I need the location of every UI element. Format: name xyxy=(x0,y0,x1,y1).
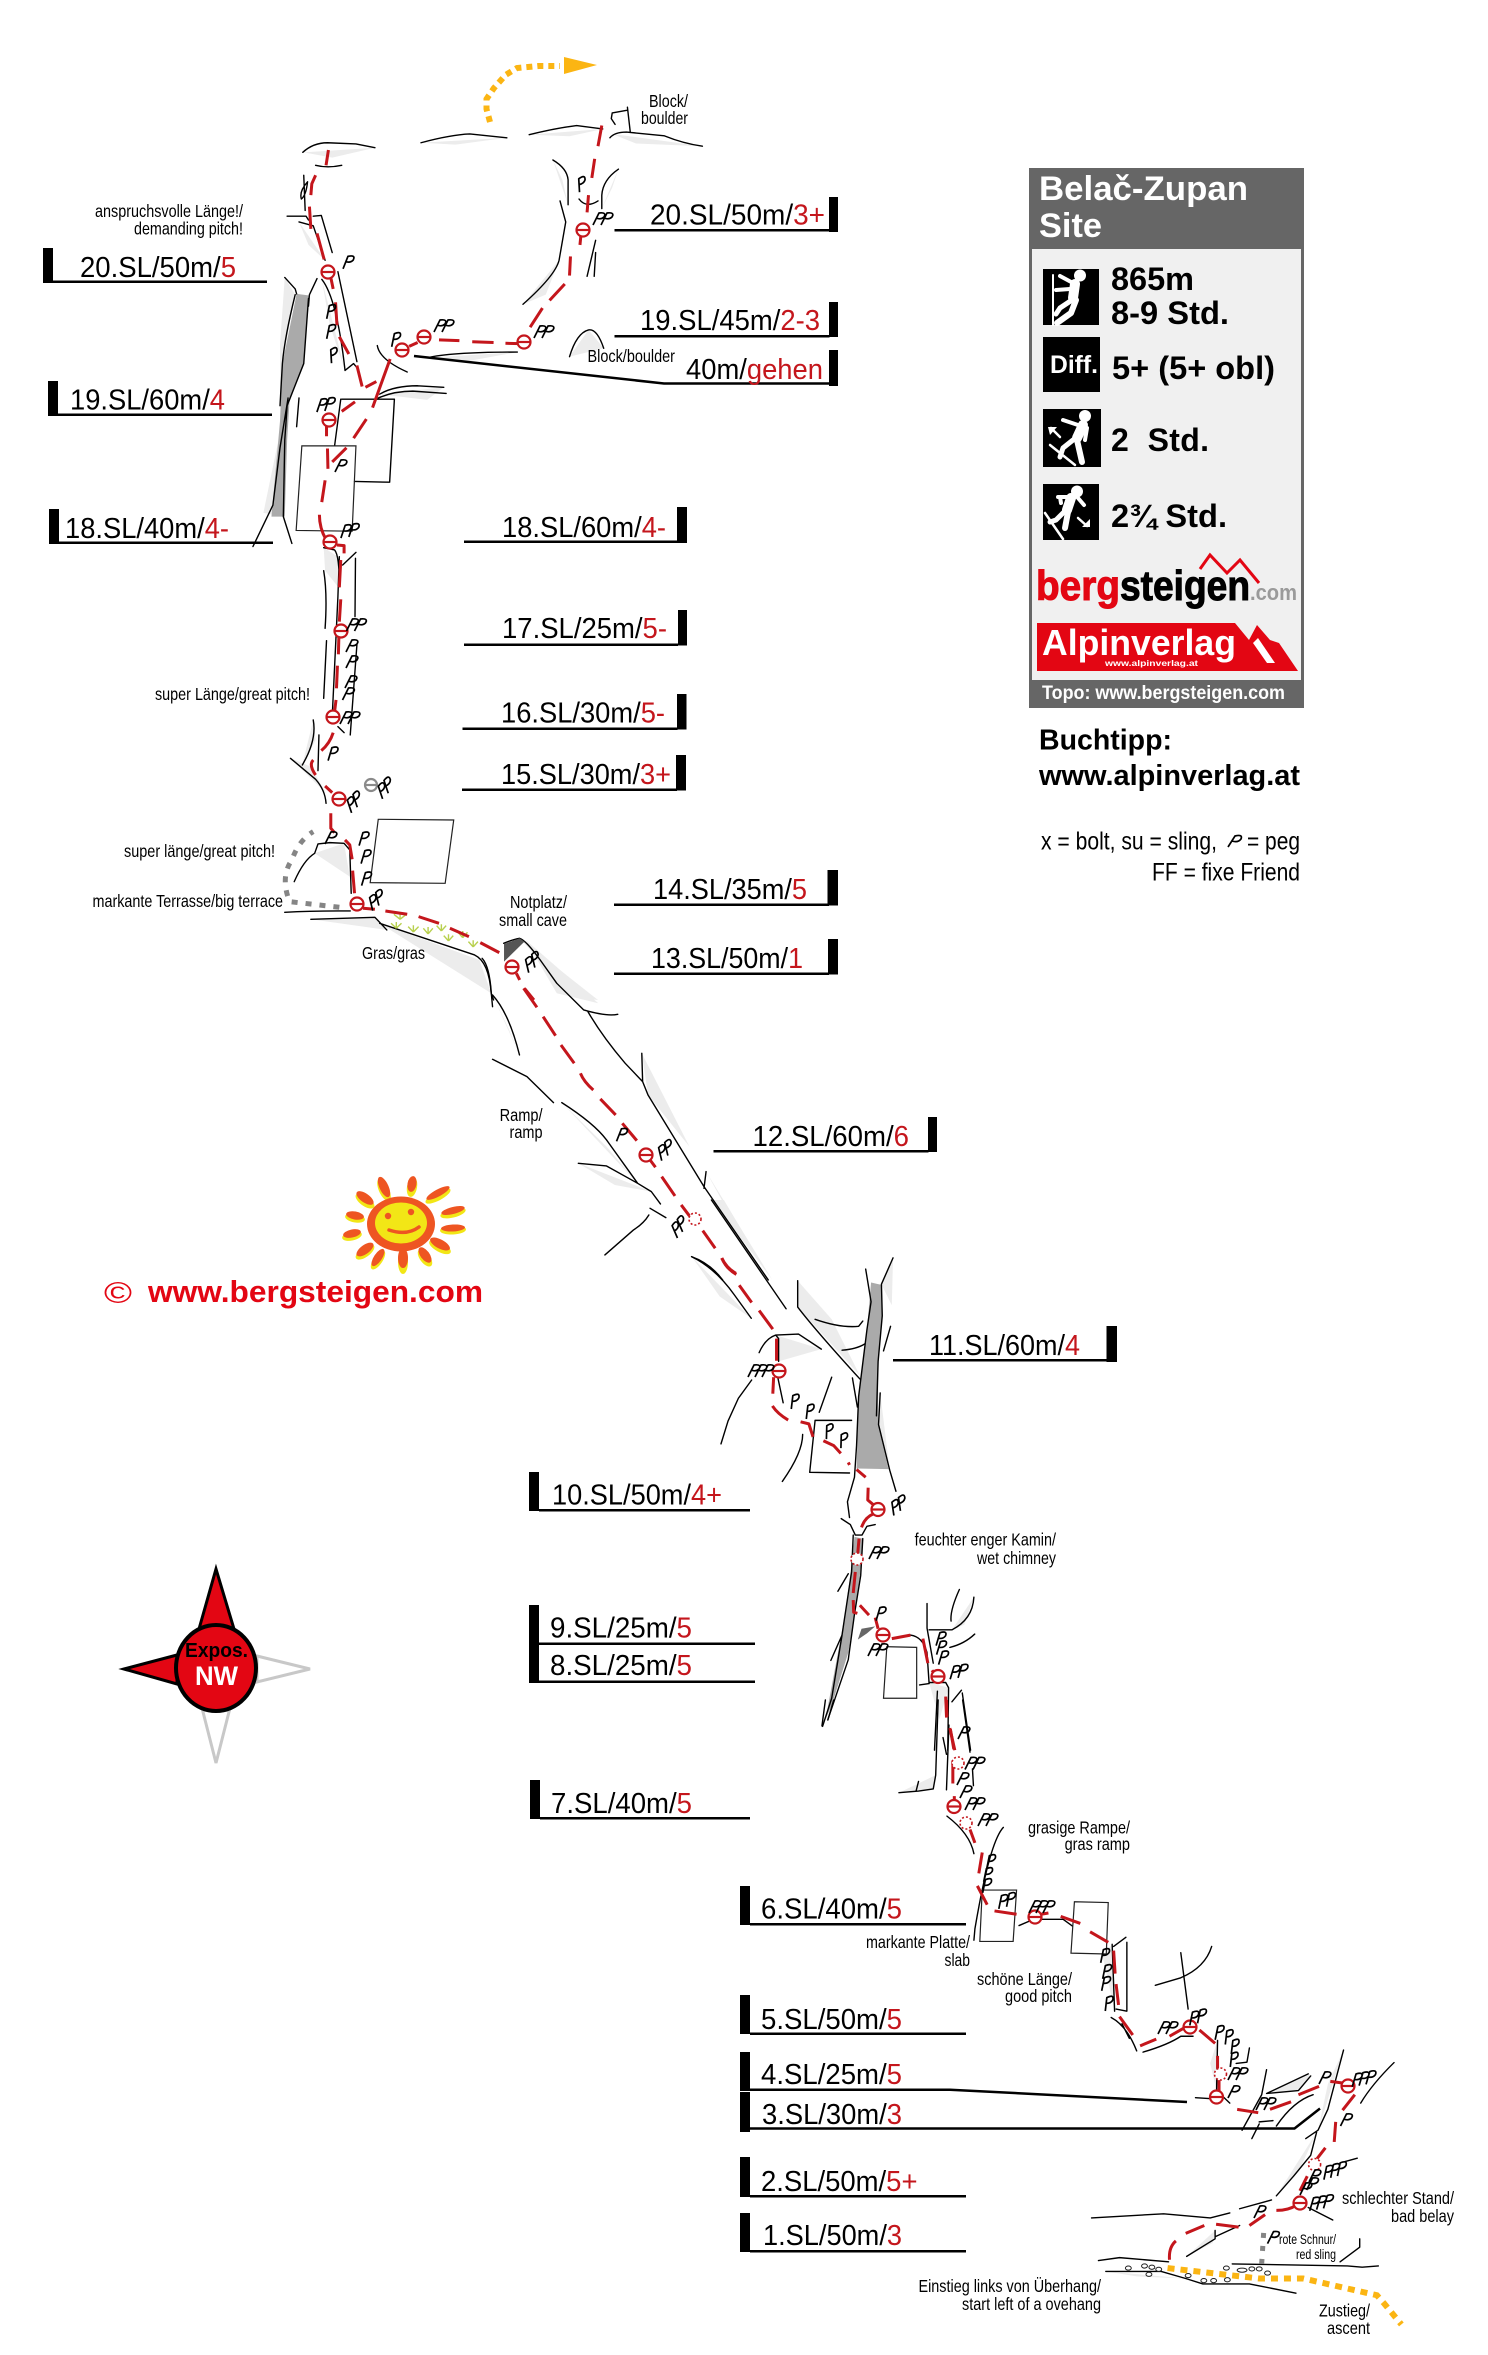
note: great pitch lower: super länge/great pitch! xyxy=(124,841,275,861)
label: pitch 7: 7.SL/40m/5 xyxy=(551,1788,692,1820)
note: great pitch upper: super Länge/great pitch! xyxy=(155,684,310,704)
note: good pitch xyxy=(977,1969,1072,2006)
note: wet chimney xyxy=(915,1530,1056,1568)
label: pitch 1 xyxy=(740,2213,966,2252)
logo: Alpinverlag xyxy=(1037,622,1298,671)
label: pitch 7 xyxy=(530,1780,750,1820)
pitch labels left xyxy=(43,248,1320,2252)
legend: FF = fixe Friend xyxy=(1152,859,1300,887)
label: pitch 14: 14.SL/35m/5 xyxy=(653,874,807,906)
label: pitch 11 xyxy=(893,1326,1117,1362)
note: small cave: small cave xyxy=(499,910,567,930)
peg symbols xyxy=(315,176,1378,2244)
stat: height and time: 865m xyxy=(1111,261,1194,297)
note: grass ramp: grasige Rampe/ xyxy=(1028,1818,1130,1838)
dark grey rock bands xyxy=(271,294,888,1719)
note: grass ramp xyxy=(1028,1818,1130,1854)
label: pitches 9 and 8: 8.SL/25m/5 xyxy=(550,1650,692,1682)
note: red sling xyxy=(1279,2231,1336,2262)
label: pitches 9 and 8 xyxy=(529,1605,755,1683)
label: pitch 1: 1.SL/50m/3 xyxy=(763,2220,902,2252)
label: pitch 20 left: 20.SL/50m/5 xyxy=(80,252,236,284)
stat: height and time xyxy=(1111,261,1229,331)
label: pitch 11: 11.SL/60m/4 xyxy=(929,1330,1080,1362)
legend: = peg xyxy=(1247,828,1300,856)
label: pitch 5 xyxy=(740,1995,966,2036)
pebbles at the start xyxy=(1125,2264,1270,2283)
note: slab: slab xyxy=(944,1950,970,1970)
note: block boulder top: Block/ xyxy=(649,91,688,111)
label: pitch 15: 15.SL/30m/3+ xyxy=(501,759,671,791)
note: start xyxy=(918,2276,1101,2314)
note: start: start left of a ovehang xyxy=(962,2294,1101,2314)
note: ascent: Zustieg/ xyxy=(1319,2300,1370,2320)
note: wet chimney: feuchter enger Kamin/ xyxy=(915,1530,1056,1550)
stat: height and time: 8-9 Std. xyxy=(1111,295,1229,331)
label: walking section 40m: 40m/gehen xyxy=(686,354,823,386)
note: grass ramp: gras ramp xyxy=(1065,1834,1130,1854)
label: pitch 12: 12.SL/60m/6 xyxy=(752,1121,909,1153)
note: grass: Gras/gras xyxy=(362,943,425,963)
approach path dotted xyxy=(1168,2268,1401,2324)
note: start: Einstieg links von Überhang/ xyxy=(918,2276,1101,2296)
label: pitch 19 left: 19.SL/60m/4 xyxy=(70,384,225,416)
logo: bergsteigen xyxy=(1036,555,1297,609)
book tip xyxy=(1038,724,1300,792)
note: red sling: rote Schnur/ xyxy=(1279,2231,1336,2247)
label: pitch 6 xyxy=(740,1886,966,1926)
label: pitch 14 xyxy=(614,870,838,906)
note: demanding pitch: anspruchsvolle Länge!/ xyxy=(95,201,243,221)
logo: bergsteigen: .com xyxy=(1250,580,1297,605)
stat: descent time: 2¾ Std. xyxy=(1111,498,1227,534)
note: slab xyxy=(866,1932,970,1970)
icon: climber xyxy=(1043,269,1099,325)
label: pitch 10: 10.SL/50m/4+ xyxy=(552,1480,722,1512)
compass exposure NW: Expos. xyxy=(185,1640,248,1662)
note: demanding pitch xyxy=(95,201,243,239)
belay stations xyxy=(322,224,1354,2210)
small cave and boulder shadows xyxy=(504,938,875,1640)
red route line xyxy=(309,126,1355,2260)
label: pitch 17 xyxy=(464,610,687,646)
note: ramp: ramp xyxy=(510,1122,542,1142)
note: ramp: Ramp/ xyxy=(500,1105,543,1125)
note: good pitch: schöne Länge/ xyxy=(977,1969,1072,1989)
logo: Alpinverlag: www.alpinverlag.at xyxy=(1104,658,1198,668)
compass exposure NW: NW xyxy=(195,1661,238,1691)
icon: descent xyxy=(1043,484,1099,540)
icon: difficulty: Diff. xyxy=(1050,351,1098,379)
panel: route info xyxy=(1029,168,1304,708)
label: pitch 15 xyxy=(462,755,686,791)
note: bad belay: schlechter Stand/ xyxy=(1342,2188,1454,2208)
label: pitch 3 xyxy=(740,2092,1320,2132)
label: pitch 4: 4.SL/25m/5 xyxy=(761,2059,902,2091)
title: Belač-Zupan xyxy=(1039,170,1248,208)
grey dotted variants xyxy=(285,832,1264,2264)
label: pitch 18 left xyxy=(49,509,273,545)
label: pitches 9 and 8: 9.SL/25m/5 xyxy=(550,1612,692,1644)
note: small cave: Notplatz/ xyxy=(510,892,567,912)
label: pitch 18 left: 18.SL/40m/4- xyxy=(65,513,229,545)
note: block boulder top xyxy=(641,91,688,128)
note: ramp xyxy=(500,1105,543,1142)
book tip: Buchtipp: xyxy=(1039,724,1172,756)
label: pitch 20 left xyxy=(43,248,267,284)
logo: bergsteigen: berg xyxy=(1036,562,1120,609)
label: pitch 19 right: 19.SL/45m/2-3 xyxy=(640,305,820,337)
note: block boulder: Block/boulder xyxy=(588,346,675,366)
label: pitch 16 xyxy=(462,694,686,730)
label: pitch 13 xyxy=(614,939,838,975)
descent arrow xyxy=(486,57,597,122)
label: pitch 12 xyxy=(714,1117,937,1153)
book tip: www.alpinverlag.at xyxy=(1038,760,1300,792)
label: pitch 18 right xyxy=(464,507,687,544)
icon: difficulty xyxy=(1043,337,1100,392)
note: big terrace: markante Terrasse/big terrace xyxy=(92,891,283,911)
icon: approach xyxy=(1043,409,1101,467)
title: Site xyxy=(1039,207,1102,245)
icon: sun logo xyxy=(341,1175,467,1274)
legend: x = bolt, su = sling, xyxy=(1041,828,1217,856)
logo: bergsteigen: steigen xyxy=(1120,562,1250,609)
rock outlines xyxy=(253,107,1394,2293)
label: pitch 19 left xyxy=(48,381,272,416)
pitch labels right xyxy=(414,197,1117,1362)
label: pitch 18 right: 18.SL/60m/4- xyxy=(502,512,666,544)
label: walking section 40m xyxy=(414,350,838,386)
title xyxy=(1039,170,1248,245)
stat: difficulty: 5+ (5+ obl) xyxy=(1112,350,1275,386)
label: pitch 13: 13.SL/50m/1 xyxy=(651,943,803,975)
stat: approach time: 2 Std. xyxy=(1111,422,1209,458)
note: ascent: ascent xyxy=(1327,2318,1370,2338)
logo: Alpinverlag: Alpinverlag xyxy=(1042,622,1236,663)
compass exposure NW xyxy=(124,1569,310,1763)
label: pitch 4 xyxy=(740,2052,1187,2102)
note: wet chimney: wet chimney xyxy=(976,1548,1056,1568)
note: good pitch: good pitch xyxy=(1005,1986,1072,2006)
rock shading xyxy=(263,129,1344,2279)
legend xyxy=(1041,828,1300,887)
label: pitch 2 xyxy=(740,2157,966,2198)
note: small cave xyxy=(499,892,567,930)
note: demanding pitch: demanding pitch! xyxy=(134,219,243,239)
footer credit: Topo: www.bergsteigen.com xyxy=(1042,683,1285,704)
label: pitch 5: 5.SL/50m/5 xyxy=(761,2004,902,2036)
label: pitch 20 right: 20.SL/50m/3+ xyxy=(650,200,825,232)
label: pitch 16: 16.SL/30m/5- xyxy=(501,698,665,730)
note: ascent xyxy=(1319,2300,1370,2338)
note: block boulder top: boulder xyxy=(641,108,688,128)
label: pitch 6: 6.SL/40m/5 xyxy=(761,1894,902,1926)
label: pitch 3: 3.SL/30m/3 xyxy=(762,2099,902,2131)
note: bad belay xyxy=(1342,2188,1454,2226)
note: bad belay: bad belay xyxy=(1391,2206,1454,2226)
label: pitch 2: 2.SL/50m/5+ xyxy=(761,2166,918,2198)
grass patches xyxy=(391,913,478,947)
copyright link: © xyxy=(104,1277,132,1310)
note: red sling: red sling xyxy=(1296,2246,1336,2262)
label: pitch 10 xyxy=(529,1472,750,1512)
copyright link: www.bergsteigen.com xyxy=(147,1274,483,1309)
label: pitch 17: 17.SL/25m/5- xyxy=(502,613,667,645)
note: slab: markante Platte/ xyxy=(866,1932,970,1952)
